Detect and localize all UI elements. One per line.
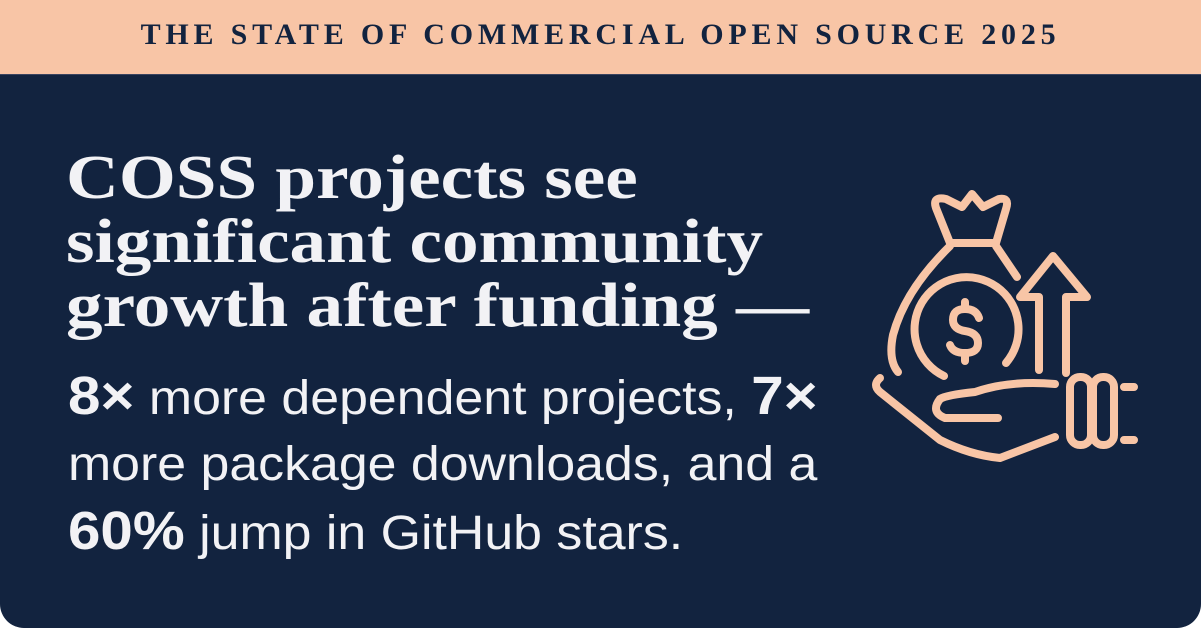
headline: COSS projects see (66, 144, 638, 212)
headline: growth after funding — (66, 272, 809, 340)
header band (0, 0, 1201, 75)
headline: significant community (66, 208, 763, 276)
stats text: 60% jump in GitHub stars. (68, 501, 683, 561)
stats text: 8× more dependent projects, 7× (68, 366, 818, 426)
headline (66, 144, 810, 340)
stats text (68, 366, 818, 561)
header band: THE STATE OF COMMERCIAL OPEN SOURCE 2025 (141, 18, 1060, 51)
stats text: more package downloads, and a (68, 438, 817, 491)
